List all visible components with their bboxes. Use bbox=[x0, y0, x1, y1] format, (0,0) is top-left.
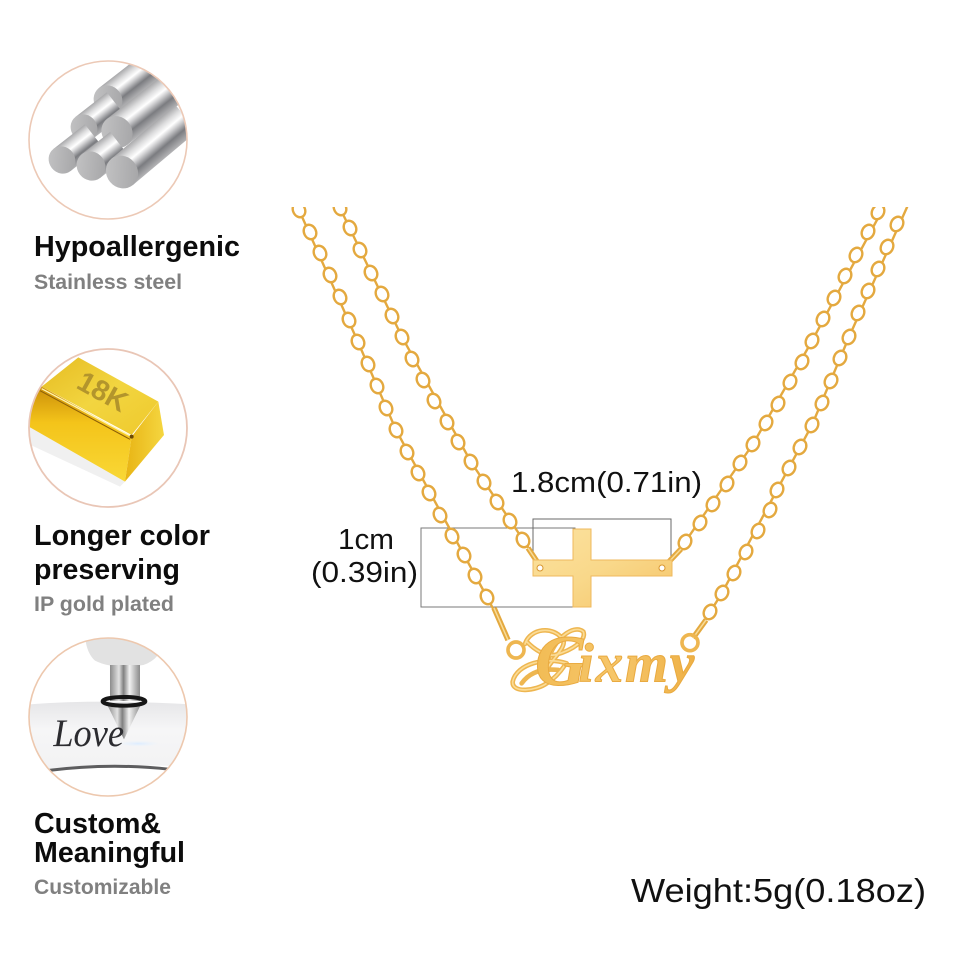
measurement box: pendant width bbox=[533, 519, 671, 569]
label: 18K stamp: 18K bbox=[72, 365, 133, 419]
heading: Custom & Meaningful: Meaningful bbox=[34, 837, 185, 869]
measurement box: pendant height bbox=[421, 528, 575, 607]
name pendant bbox=[508, 622, 698, 701]
icon: stainless steel rods bbox=[29, 52, 197, 219]
chain: inner strand right bbox=[663, 203, 887, 568]
label: weight: Weight:5g(0.18oz) bbox=[631, 872, 926, 909]
cross pendant bbox=[533, 529, 672, 607]
name text: ixmy bbox=[578, 633, 696, 694]
chain: inner strand left bbox=[331, 199, 540, 566]
icon: 18K gold bar bbox=[20, 349, 187, 507]
name text: G bbox=[535, 622, 587, 701]
panel: custom feature bbox=[28, 637, 188, 894]
heading: Longer color preserving: Longer color bbox=[34, 520, 210, 552]
heading: Custom & Meaningful bbox=[34, 808, 185, 869]
text: IP gold plated: IP gold plated bbox=[34, 593, 174, 616]
text: Customizable: Customizable bbox=[34, 876, 171, 899]
heading: Hypoallergenic: Hypoallergenic bbox=[34, 231, 240, 263]
heading: Longer color preserving bbox=[34, 520, 210, 586]
text: Stainless steel: Stainless steel bbox=[34, 271, 182, 294]
label: height measurement: (0.39in) bbox=[311, 557, 418, 589]
heading: Custom & Meaningful: Custom& bbox=[34, 808, 161, 840]
label: width measurement: 1.8cm(0.71in) bbox=[511, 467, 702, 499]
label: height measurement: 1cm bbox=[338, 524, 394, 556]
label: height measurement bbox=[311, 524, 418, 589]
heading: Longer color preserving: preserving bbox=[34, 554, 180, 586]
chain: outer strand left bbox=[290, 201, 508, 640]
necklace chains bbox=[290, 199, 908, 640]
chain: outer strand right bbox=[693, 205, 908, 638]
panel: colour preserving feature bbox=[20, 349, 210, 616]
label: engraved Love: Love bbox=[52, 711, 124, 755]
panel: hypoallergenic feature bbox=[29, 52, 240, 294]
icon: laser engraving bbox=[28, 637, 188, 797]
